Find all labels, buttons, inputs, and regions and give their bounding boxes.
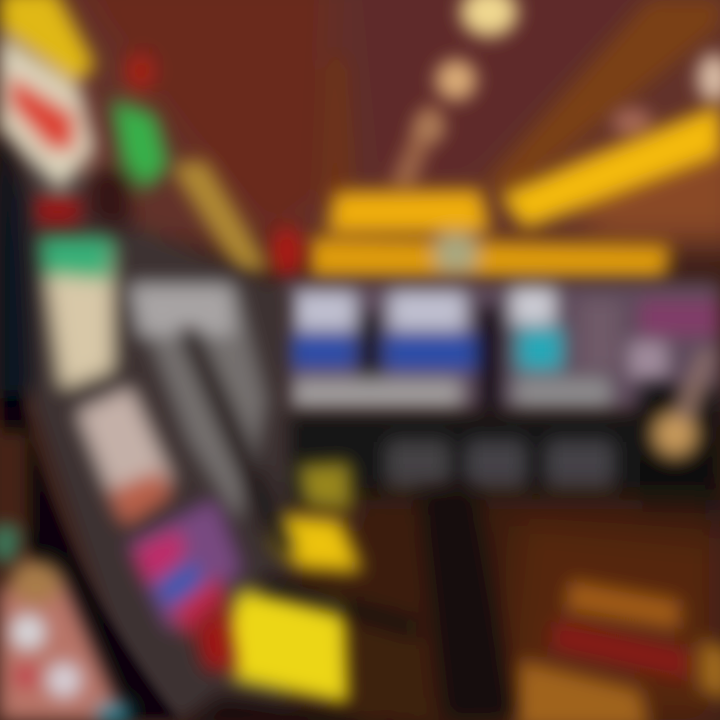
lower dark foreground (180, 695, 440, 720)
upper-left machine tops (0, 0, 168, 230)
back wall machines (280, 282, 720, 415)
ceiling beams (322, 0, 720, 200)
black curved machine edge (0, 130, 180, 720)
red accent beside yellow panel (195, 600, 235, 670)
ceiling (40, 0, 720, 250)
yellow signage band (310, 105, 720, 278)
carpet floor (350, 500, 720, 720)
left machine bank (20, 120, 290, 720)
red ceiling accent (269, 226, 305, 278)
mid-ground dark row (270, 350, 720, 520)
yellow machine panels (225, 462, 362, 705)
ceiling lights (416, 0, 720, 142)
left ceiling yellow strip (170, 160, 270, 275)
dark central pillar (420, 490, 515, 720)
bottom-left machine (0, 430, 129, 720)
dark machine divider (180, 330, 295, 558)
